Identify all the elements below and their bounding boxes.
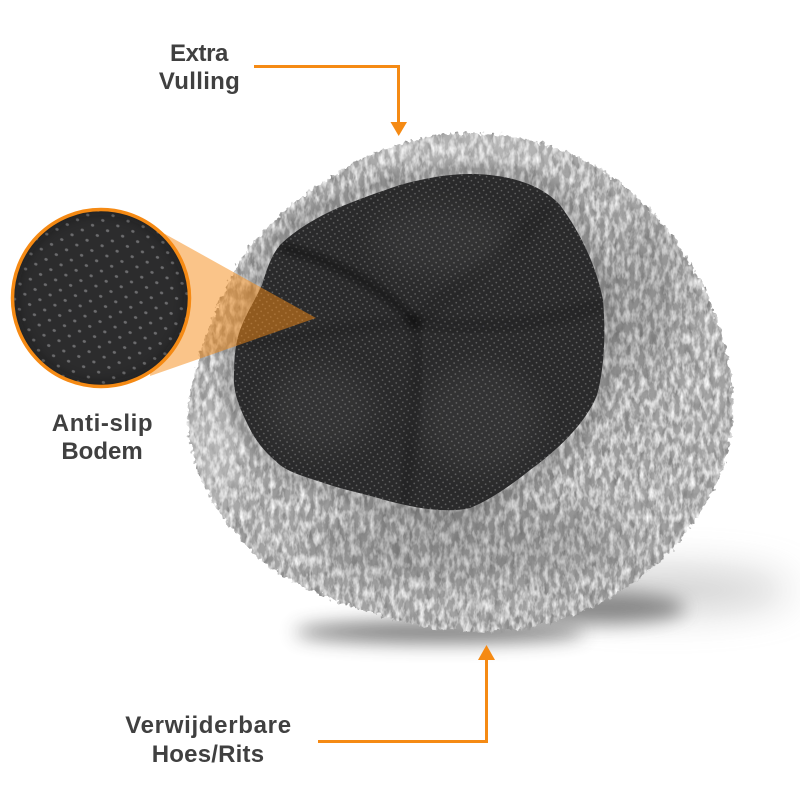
black anti-slip cushion [234,174,604,510]
label: Verwijderbare Hoes/Rits: Hoes/Rits [152,741,264,768]
cushion creases [245,210,600,500]
fur tonal shading [191,136,680,583]
pet bed fur ring [188,133,733,632]
inner fur shading [228,168,611,516]
callout: anti-slip magnifier [9,206,193,390]
cushion highlights [285,223,520,456]
label: Anti-slip Bodem: Bodem [61,438,143,465]
arrow: Extra Vulling [254,66,407,136]
ground shadow [295,570,790,643]
arrow: Hoes/Rits [318,645,495,742]
label: Anti-slip Bodem: Anti-slip [52,410,153,437]
label: Verwijderbare Hoes/Rits: Verwijderbare [125,712,292,739]
label: Extra Vulling: Vulling [159,68,240,95]
callout: magnifier cone [150,234,316,376]
label: Extra Vulling: Extra [170,40,229,67]
